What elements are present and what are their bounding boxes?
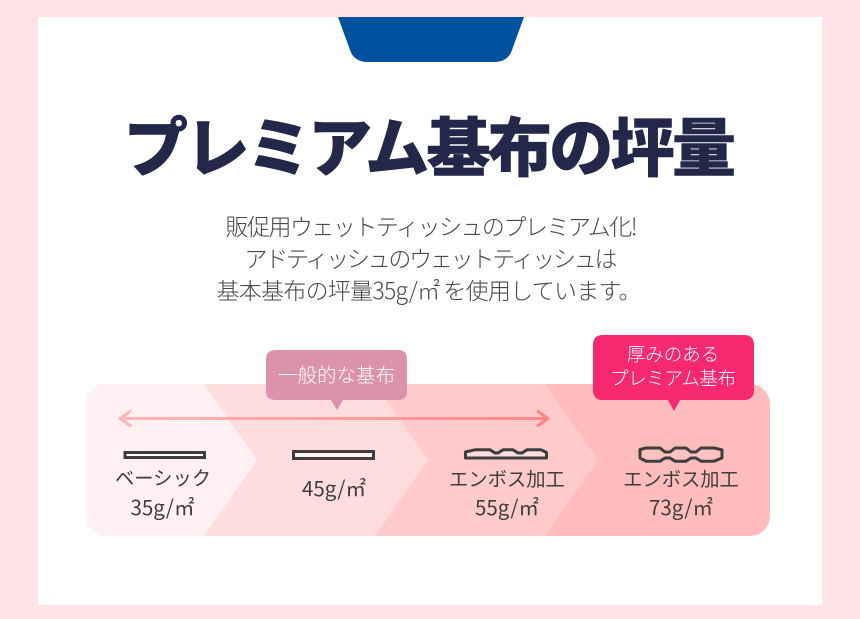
description text: 販促用ウェットティッシュのプレミアム化! — [226, 208, 638, 242]
callout: standard base fabric: 一般的な基布 — [278, 359, 395, 388]
segment: 55g — [375, 384, 598, 536]
label: embossed 55g: エンボス加工 — [449, 464, 565, 492]
description text — [216, 208, 642, 306]
label: embossed 73g: エンボス加工 — [623, 464, 739, 492]
segment: 45g — [204, 384, 428, 536]
label: basic 35g: 35g/㎡ — [131, 491, 194, 521]
label: embossed 55g — [449, 464, 565, 521]
icon: flat sheet 35g — [125, 452, 204, 458]
icon: flat sheet 45g — [294, 452, 374, 458]
callout: premium base fabric — [593, 335, 754, 411]
icon: embossed sheet 73g — [640, 448, 722, 461]
callout: premium base fabric: 厚みのある — [627, 341, 719, 367]
label: embossed 73g: 73g/㎡ — [649, 491, 713, 521]
label: basic 35g — [115, 463, 211, 521]
weight comparison band — [86, 384, 770, 536]
description text: 基本基布の坪量35g/㎡を使用しています。 — [216, 272, 642, 306]
label: embossed 55g: 55g/㎡ — [475, 491, 539, 521]
label: embossed 73g — [623, 464, 739, 521]
icon: embossed sheet 55g — [466, 450, 546, 458]
label: 45g: 45g/㎡ — [302, 472, 366, 502]
callout: standard base fabric — [266, 350, 407, 410]
callout: premium base fabric: プレミアム基布 — [610, 365, 736, 391]
description text: アドティッシュのウェットティッシュは — [244, 240, 618, 274]
title: プレミアム基布の坪量 — [124, 98, 736, 190]
double-headed arrow — [120, 412, 548, 426]
segment: premium — [545, 384, 770, 536]
segment: 35g — [86, 384, 257, 536]
blue top tab — [338, 17, 524, 62]
label: basic 35g: ベーシック — [115, 463, 211, 491]
